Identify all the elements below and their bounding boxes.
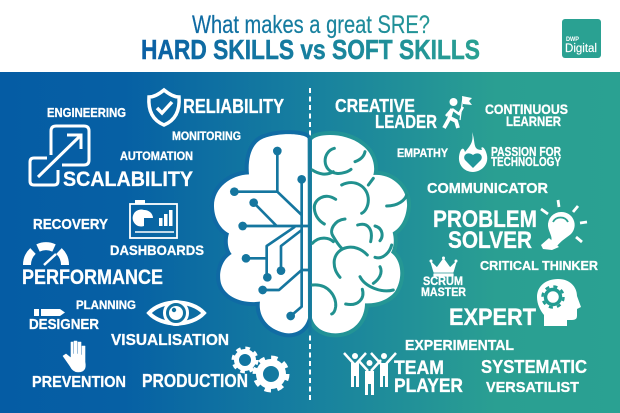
label: PASSION FOR: PASSION FOR (491, 145, 561, 159)
label: SYSTEMATIC: SYSTEMATIC (481, 357, 587, 377)
brain: left circuit traces (234, 151, 309, 316)
label: CREATIVE: CREATIVE (335, 96, 415, 116)
centre dashed divider (309, 88, 311, 401)
label: CRITICAL THINKER: CRITICAL THINKER (480, 258, 599, 273)
label: EMPATHY: EMPATHY (397, 146, 448, 160)
label: SCALABILITY: SCALABILITY (63, 168, 193, 191)
icon: scalability arrow (30, 126, 89, 185)
title line 1: What makes a great SRE? (192, 11, 430, 39)
brain: right hemisphere (312, 135, 407, 333)
label: MASTER: MASTER (421, 285, 466, 299)
icon: flame with heart (459, 132, 487, 172)
label: PLAYER: PLAYER (394, 376, 463, 397)
brain: centre line (305, 138, 314, 333)
label: AUTOMATION: AUTOMATION (120, 149, 193, 163)
label: EXPERT: EXPERT (449, 304, 536, 331)
logo: DWP Digital: DWP (566, 36, 580, 43)
label: RECOVERY: RECOVERY (33, 216, 108, 233)
label: PLANNING: PLANNING (76, 298, 136, 312)
icon: shield (149, 90, 179, 125)
brain: left hemisphere (214, 134, 308, 333)
icon: performance gauge (27, 246, 65, 265)
icon: crown (430, 256, 458, 276)
label: TECHNOLOGY: TECHNOLOGY (491, 155, 562, 169)
brain: circuit nodes (230, 147, 306, 320)
label: PREVENTION: PREVENTION (32, 374, 126, 391)
icon: head with gear (537, 279, 581, 326)
logo: DWP Digital: Digital (565, 43, 597, 55)
label: LEADER: LEADER (375, 112, 437, 132)
label: DESIGNER: DESIGNER (29, 316, 99, 333)
label: EXPERIMENTAL: EXPERIMENTAL (405, 338, 514, 354)
icon: eye (149, 302, 204, 324)
label: MONITORING: MONITORING (172, 131, 241, 143)
title line 2: HARD SKILLS vs SOFT SKILLS (141, 34, 480, 65)
label: PERFORMANCE: PERFORMANCE (22, 266, 163, 289)
icon: light bulb (541, 200, 587, 250)
label: SCRUM: SCRUM (423, 274, 463, 288)
label: ENGINEERING: ENGINEERING (47, 106, 126, 120)
icon: team of people (344, 353, 396, 395)
label: PRODUCTION: PRODUCTION (142, 371, 248, 391)
label: CONTINUOUS: CONTINUOUS (485, 101, 568, 117)
label: TEAM: TEAM (394, 358, 444, 379)
label: SOLVER: SOLVER (448, 227, 532, 254)
label: VERSATILIST: VERSATILIST (486, 379, 579, 396)
label: LEARNER: LEARNER (506, 113, 561, 129)
brain illustration (214, 134, 407, 333)
header background (0, 0, 620, 72)
icon: walker with flag (444, 96, 472, 128)
icon: gears (233, 348, 288, 390)
icon: hand (63, 341, 85, 372)
logo: DWP Digital (562, 19, 601, 58)
label: RELIABILITY: RELIABILITY (183, 96, 285, 118)
label: VISUALISATION: VISUALISATION (111, 332, 229, 349)
label: DASHBOARDS: DASHBOARDS (110, 242, 204, 258)
brain: right folds (312, 148, 407, 314)
icon: dashboard (130, 200, 177, 238)
label: PROBLEM: PROBLEM (433, 206, 537, 233)
icon: pencil (34, 309, 65, 316)
label: COMMUNICATOR: COMMUNICATOR (427, 180, 548, 197)
